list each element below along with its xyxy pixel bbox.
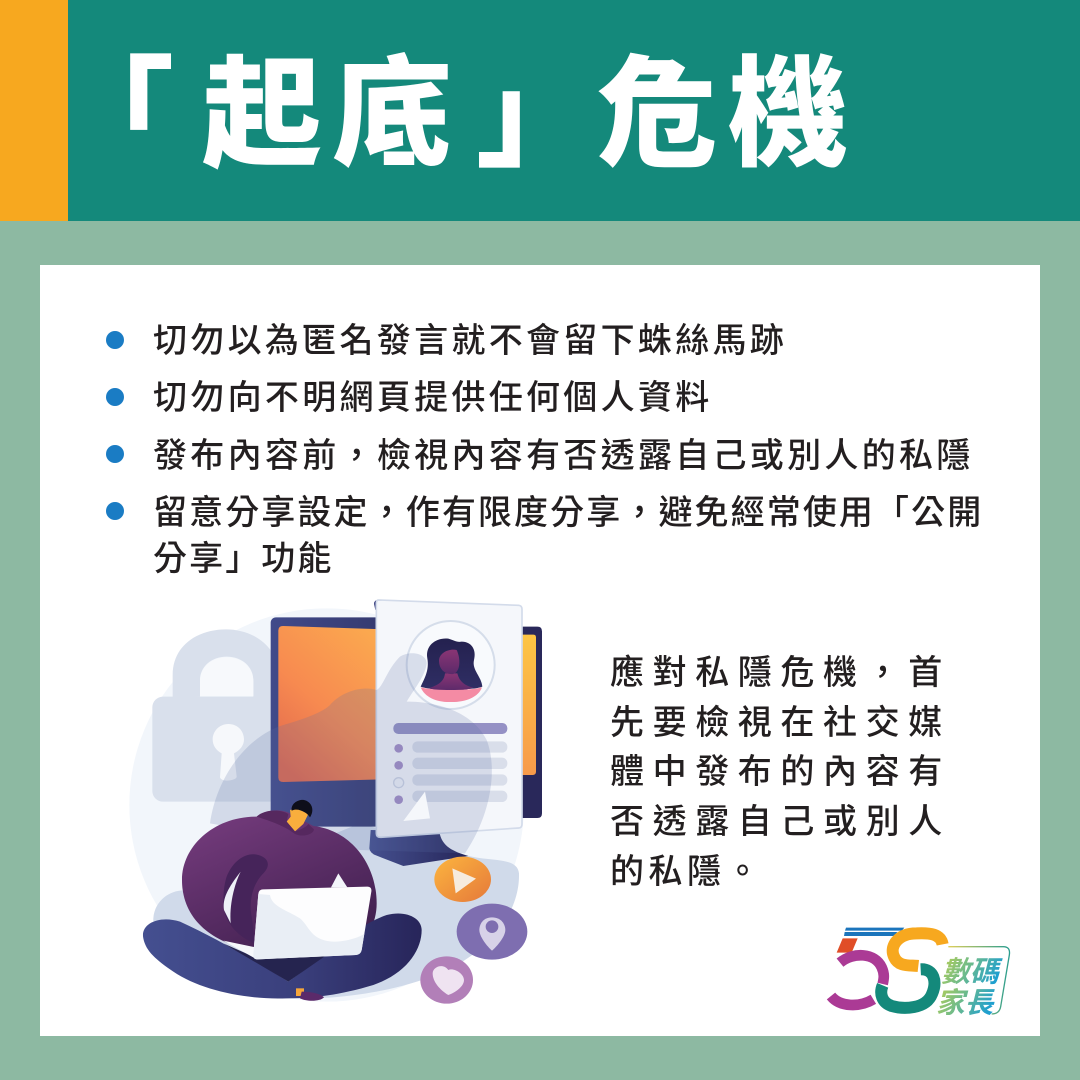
person [143, 800, 422, 1001]
text: 應對私隱危機，首 [610, 645, 951, 694]
header band [0, 0, 1080, 221]
icon: location bubble [457, 904, 527, 960]
white content panel [40, 265, 1040, 1036]
icon: play bubble [434, 857, 491, 902]
title: 底 [332, 48, 452, 182]
text: 體中發布的內容有 [610, 753, 951, 791]
title: 」 [476, 48, 596, 182]
bullet list [106, 322, 983, 578]
illustration: person with laptop, monitor and profile card [130, 599, 542, 1004]
bullet 4: 留意分享設定，作有限度分享，避免經常使用「公開 [153, 485, 983, 534]
text rows [393, 723, 507, 734]
white arrow on card [403, 792, 430, 821]
arm [223, 854, 268, 943]
hood collar [257, 811, 314, 836]
bullet 4 [106, 485, 983, 578]
text: 先要檢視在社交媒 [610, 704, 951, 742]
lock icon [152, 629, 286, 802]
torso [182, 810, 377, 950]
profile card [374, 600, 522, 837]
bullet 1: 切勿以為匿名發言就不會留下蛛絲馬跡 [153, 322, 787, 360]
logo: 55 anniversary mark [826, 927, 1010, 1020]
text: 否透露自己或別人 [610, 803, 951, 841]
logo wordmark: 數碼 [941, 956, 1003, 988]
side paragraph [610, 645, 951, 891]
bullet 2: 切勿向不明網頁提供任何個人資料 [153, 379, 712, 417]
legs [143, 914, 422, 999]
title: 機 [728, 48, 848, 182]
title: 危 [597, 48, 717, 182]
icon: heart bubble [420, 956, 473, 1004]
white triangle by arm [331, 873, 347, 887]
foot [296, 988, 304, 996]
translucent shadow silhouette [210, 653, 492, 853]
title: 起 [202, 48, 322, 182]
title [54, 48, 848, 182]
avatar [407, 621, 495, 709]
laptop [223, 941, 260, 958]
bullet 3: 發布內容前，檢視內容有否透露自己或別人的私隱 [153, 428, 974, 477]
head [287, 808, 308, 831]
title: 「 [54, 48, 174, 182]
monitor [271, 617, 542, 866]
pale background circle [129, 608, 524, 1002]
orange accent block [0, 0, 68, 221]
ground shadow [153, 823, 519, 999]
bullet 4: 分享」功能 [153, 540, 334, 578]
logo: 55 anniversary mark: 家長 [936, 988, 996, 1020]
text: 的私隱。 [610, 853, 764, 891]
